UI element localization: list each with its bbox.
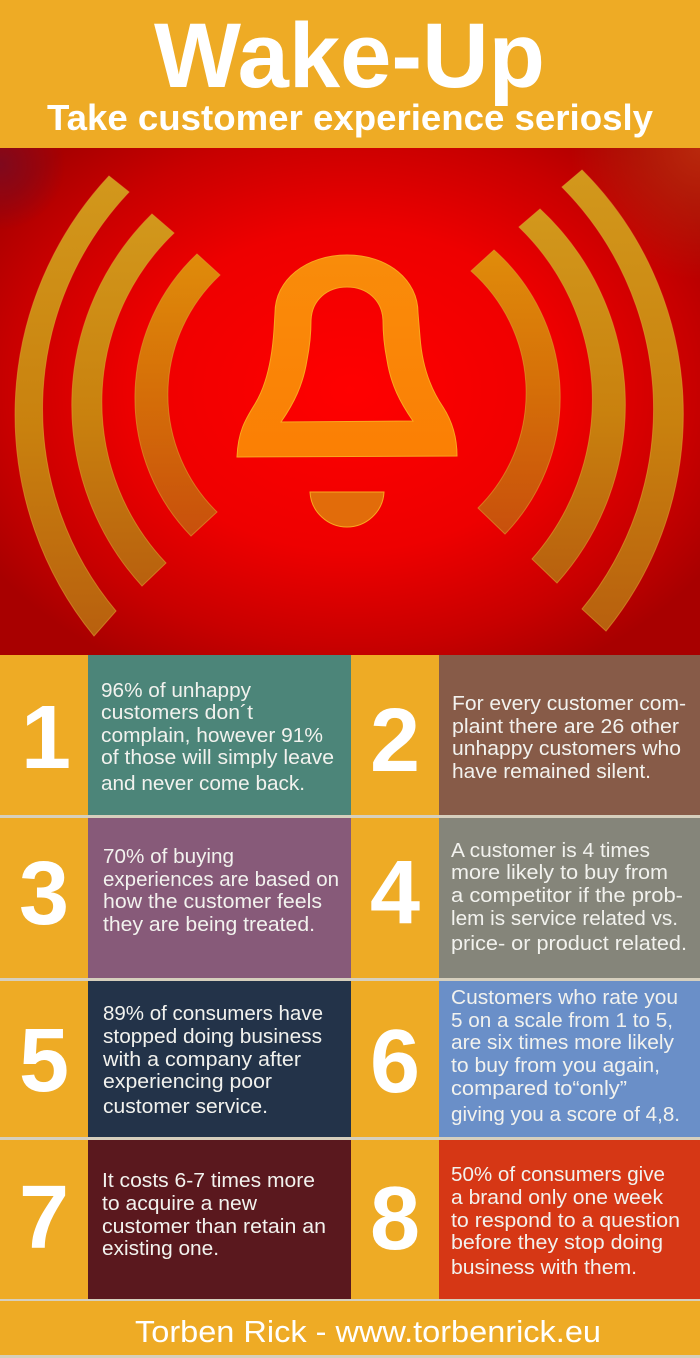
text block 1: 96% of unhappy	[101, 680, 251, 702]
text block 6: compared to“only”	[451, 1078, 627, 1100]
text block 6: are six times more likely	[451, 1032, 674, 1054]
title: Wake-Up	[154, 5, 545, 107]
text block 4: more likely to buy from	[451, 862, 668, 884]
text block 1: complain, however 91%	[101, 725, 323, 747]
text block 8: 50% of consumers give	[451, 1164, 665, 1186]
text block 5: with a company after	[102, 1049, 301, 1071]
text block 7	[102, 1170, 326, 1260]
panel 4	[351, 818, 700, 978]
text block 8: business with them.	[451, 1257, 637, 1279]
text block 1: customers don´t	[101, 702, 253, 724]
panel 6	[351, 981, 700, 1137]
text block 3: they are being treated.	[103, 914, 315, 936]
number 2: 2	[370, 691, 420, 791]
text block 5: stopped doing business	[103, 1026, 322, 1048]
panel 5	[0, 981, 351, 1137]
text block 4: lem is service related vs.	[451, 908, 678, 930]
text block 6: giving you a score of 4,8.	[451, 1104, 680, 1126]
text block 6: 5 on a scale from 1 to 5,	[451, 1010, 673, 1032]
text block 1: and never come back.	[101, 773, 305, 795]
text block 4	[451, 840, 687, 955]
header band	[0, 0, 700, 148]
icon: right sound waves	[471, 170, 683, 631]
number 4: 4	[370, 843, 420, 943]
hero image: alarm bell on red	[0, 148, 700, 655]
row dividers	[0, 815, 700, 1358]
text block 7: customer than retain an	[102, 1216, 326, 1238]
text block 4: price- or product related.	[451, 933, 687, 955]
text block 2	[452, 693, 686, 783]
text block 5: experiencing poor	[103, 1071, 272, 1093]
text block 6	[451, 987, 680, 1126]
number 8: 8	[370, 1169, 420, 1269]
text block 4: A customer is 4 times	[451, 840, 650, 862]
text block 2: have remained silent.	[452, 761, 651, 783]
text block 7: existing one.	[102, 1238, 219, 1260]
panel 8	[351, 1140, 700, 1299]
text block 3: how the customer feels	[103, 891, 322, 913]
text block 1: of those will simply leave	[101, 747, 334, 769]
number 5: 5	[19, 1011, 69, 1111]
text block 2: For every customer com-	[452, 693, 686, 715]
number 7: 7	[19, 1168, 69, 1268]
icon: bell	[237, 255, 457, 527]
number 1: 1	[21, 688, 71, 788]
panel 3	[0, 818, 351, 978]
number 3: 3	[19, 844, 69, 944]
icon: left sound waves	[15, 176, 220, 636]
text block 1	[101, 680, 334, 795]
panel 1	[0, 655, 351, 815]
text block 2: unhappy customers who	[452, 738, 681, 760]
footer credit: Torben Rick - www.torbenrick.eu	[135, 1314, 601, 1349]
text block 3: 70% of buying	[103, 846, 234, 868]
text block 8	[451, 1164, 680, 1279]
text block 5	[102, 1003, 323, 1118]
panel 2	[351, 655, 700, 815]
number 6: 6	[370, 1012, 420, 1112]
text block 6: Customers who rate you	[451, 987, 678, 1009]
text block 4: a competitor if the prob-	[451, 885, 683, 907]
text block 8: a brand only one week	[451, 1187, 664, 1209]
text block 3: experiences are based on	[103, 869, 339, 891]
text block 7: to acquire a new	[102, 1193, 258, 1215]
text block 5: 89% of consumers have	[103, 1003, 323, 1025]
subtitle: Take customer experience seriosly	[47, 97, 653, 138]
text block 8: before they stop doing	[451, 1232, 663, 1254]
text block 8: to respond to a question	[451, 1210, 680, 1232]
text block 3	[103, 846, 339, 936]
icon: bell clapper	[310, 492, 384, 527]
text block 7: It costs 6-7 times more	[102, 1170, 315, 1192]
panel 7	[0, 1140, 351, 1299]
text block 5: customer service.	[103, 1096, 268, 1118]
footer band	[0, 1301, 700, 1355]
text block 2: plaint there are 26 other	[452, 716, 679, 738]
text block 6: to buy from you again,	[451, 1055, 660, 1077]
